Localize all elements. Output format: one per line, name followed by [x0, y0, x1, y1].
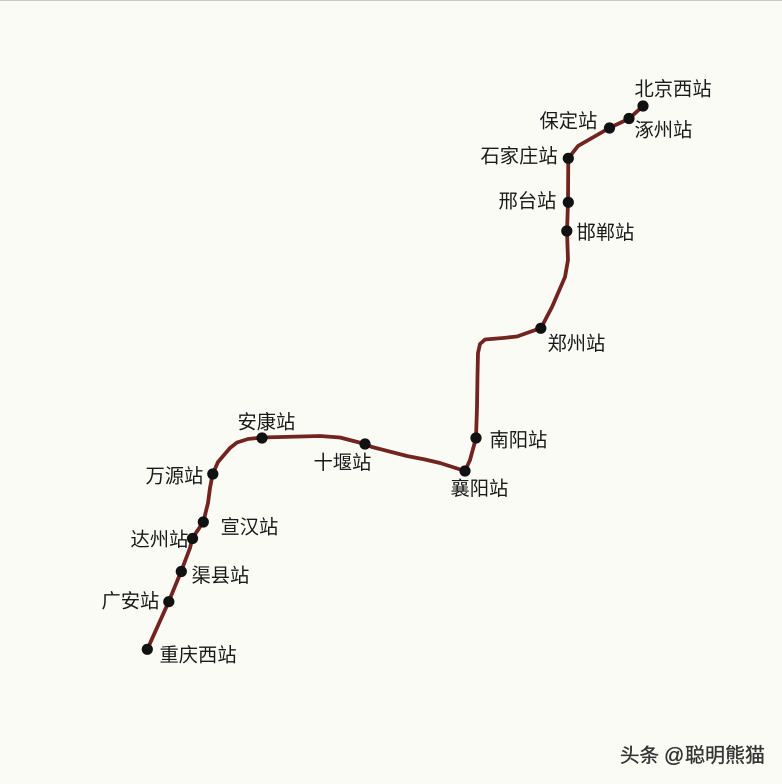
station labels: 邯郸站	[576, 222, 634, 244]
station labels: 渠县站	[192, 565, 249, 587]
station labels: 涿州站	[634, 120, 692, 142]
station labels: 郑州站	[548, 333, 605, 355]
watermark	[620, 744, 765, 767]
station labels: 宣汉站	[220, 516, 278, 538]
station labels: 北京西站	[634, 78, 712, 100]
route line	[147, 106, 643, 649]
station labels: 重庆西站	[160, 644, 237, 666]
station labels: 万源站	[146, 466, 203, 488]
station labels: 安康站	[238, 412, 295, 434]
station markers	[142, 100, 649, 655]
station labels: 十堰站	[314, 452, 371, 474]
watermark: 聪明熊猫	[685, 744, 765, 767]
station labels: 达州站	[130, 529, 188, 551]
station labels: 石家庄站	[480, 146, 558, 168]
station labels: 襄阳站	[450, 478, 508, 500]
station labels: 保定站	[540, 110, 597, 132]
station labels	[102, 78, 712, 666]
station labels: 广安站	[102, 590, 159, 612]
watermark: 头条	[620, 745, 659, 767]
station labels: 邢台站	[498, 190, 556, 212]
watermark: @	[664, 745, 684, 767]
station labels: 南阳站	[490, 430, 547, 452]
